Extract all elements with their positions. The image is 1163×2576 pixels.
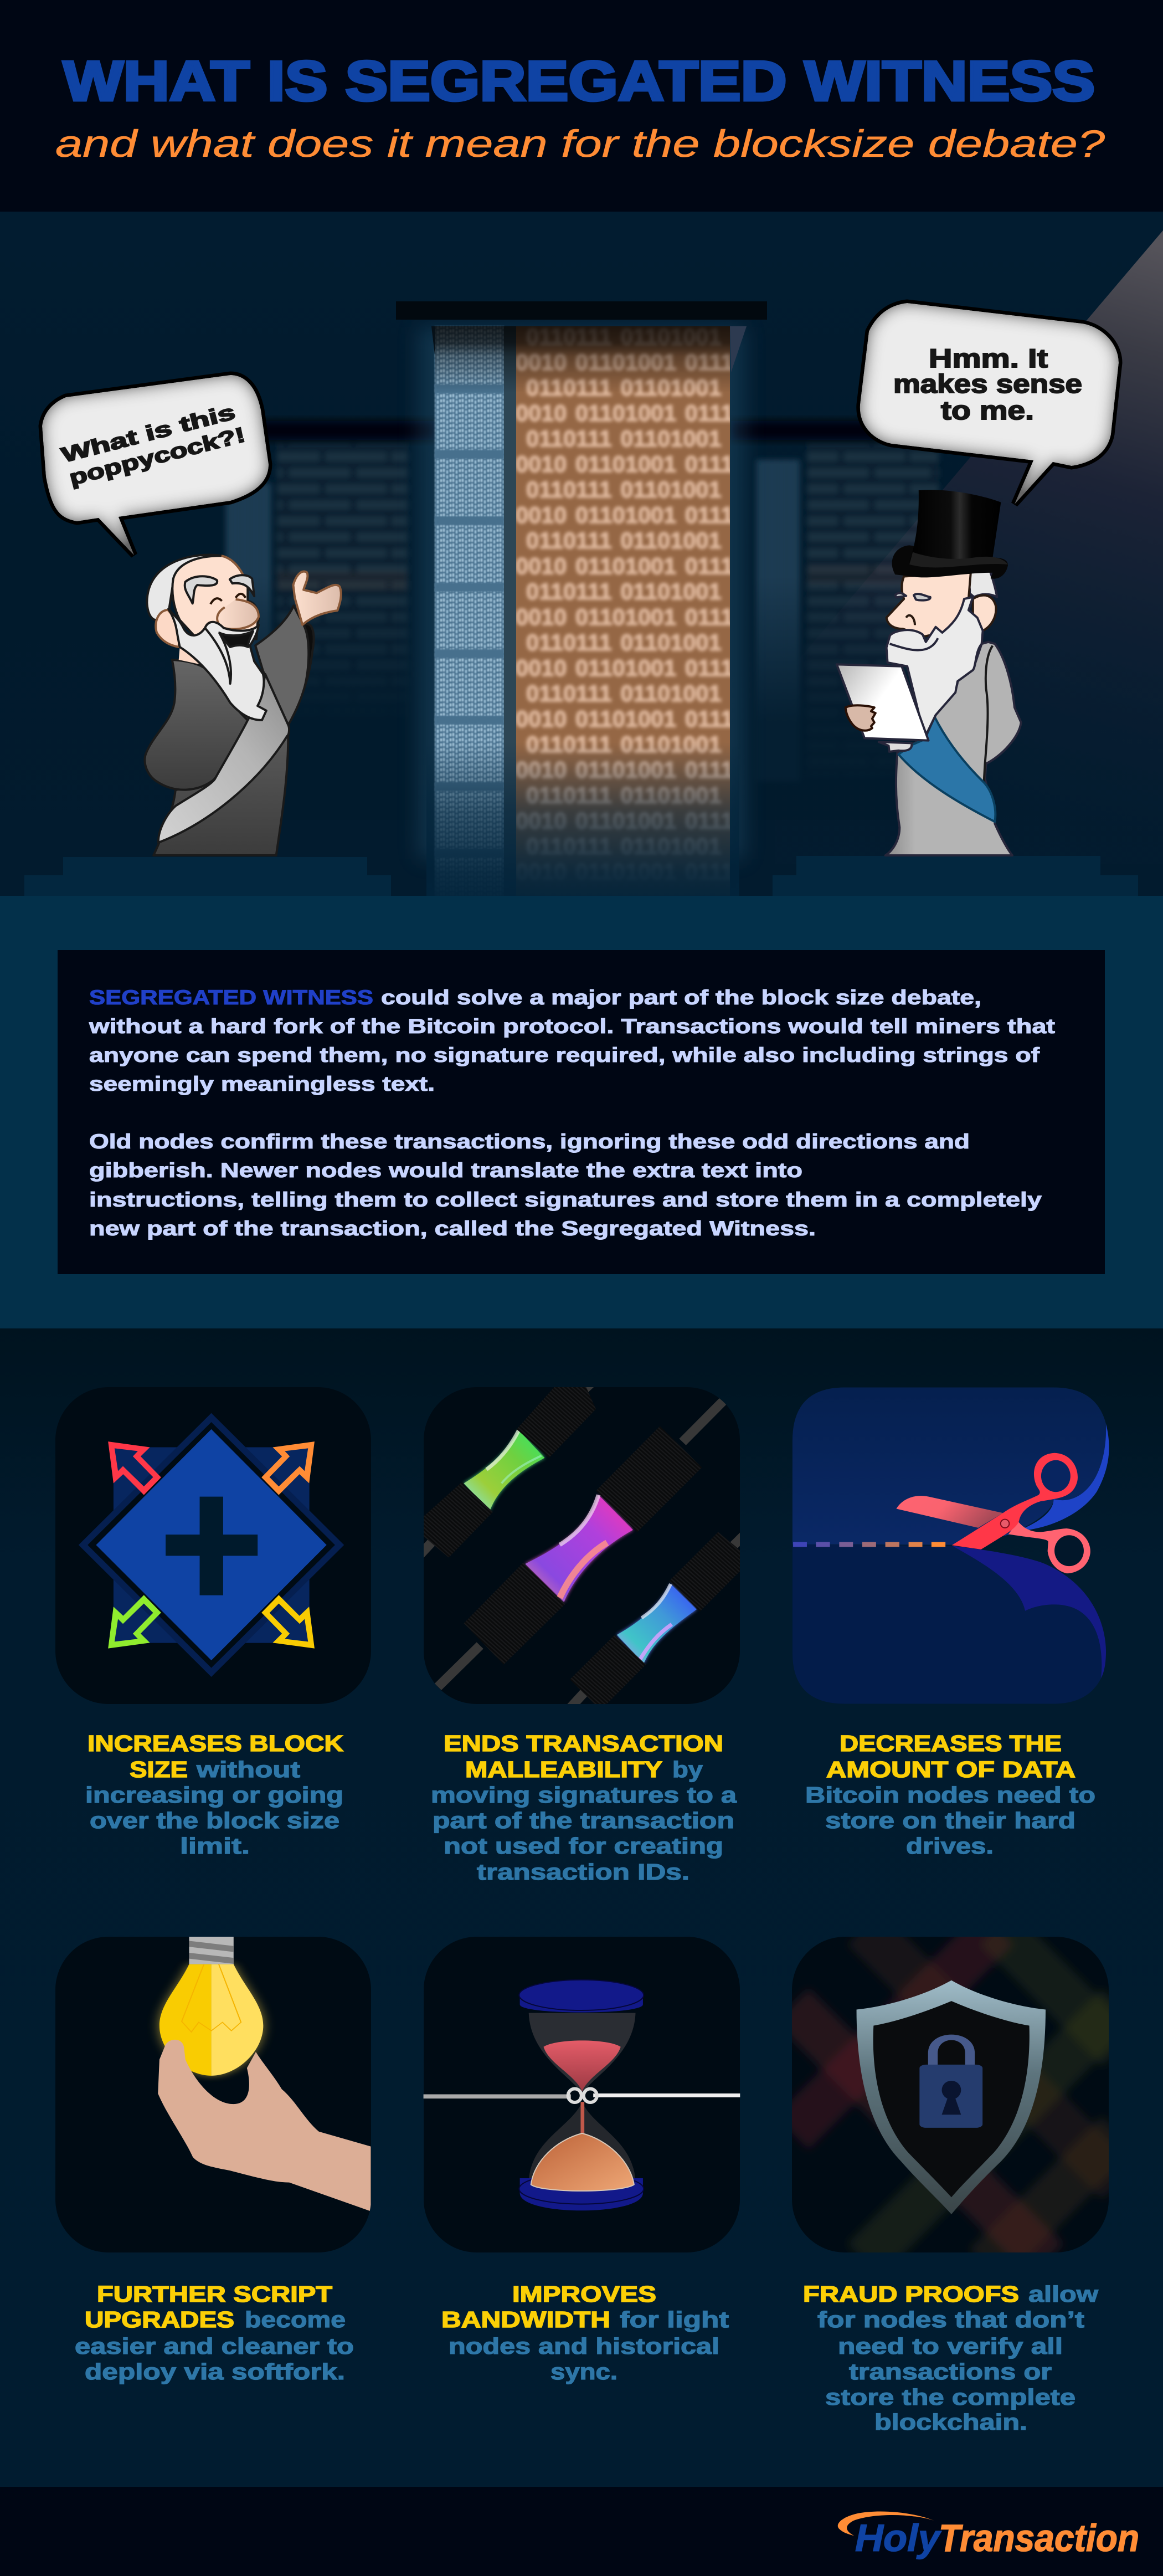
subtitle: and what does it mean for the blocksize debate?	[55, 122, 1105, 165]
orange binary column: 0110111 01101001	[526, 527, 722, 553]
icon: transaction malleability cables	[424, 1387, 740, 1704]
bubble text	[893, 343, 1082, 425]
arrow: green	[108, 1595, 161, 1649]
caption: decreases the amount of data: drives.	[906, 1833, 994, 1859]
panel: intro text: gibberish. Newer nodes would translate the extra text into	[89, 1159, 802, 1182]
scissors	[896, 1453, 1090, 1573]
bubble text: Hmm. It	[929, 343, 1048, 373]
caption: fraud proofs: allow	[1028, 2281, 1098, 2307]
caption: decreases the amount of data: AMOUNT OF DATA	[826, 1757, 1075, 1782]
panel: intro text	[58, 950, 1105, 1274]
icon: hand holding light bulb	[55, 1937, 371, 2252]
orange binary column: 0110111 01101001	[526, 324, 722, 350]
orange binary column: 0110111 01101001	[526, 731, 722, 757]
orange binary column: 0010 01101001 01111	[516, 757, 745, 783]
icon: increases block size	[55, 1387, 371, 1704]
title: WHAT IS SEGREGATED WITNESS	[63, 50, 1095, 112]
spotlight beam	[775, 230, 1163, 864]
orange binary column	[516, 324, 745, 897]
caption: further script upgrades	[75, 2281, 354, 2384]
caption: decreases the amount of data: DECREASES THE	[840, 1731, 1062, 1756]
header band	[0, 0, 1163, 212]
icon: hourglass with knotted rope	[424, 1937, 740, 2252]
bubble text: What is this	[59, 401, 238, 468]
orange binary column: 0110111 01101001	[526, 782, 722, 808]
speech bubble: left	[42, 375, 269, 555]
caption: decreases the amount of data: store on their hard	[825, 1808, 1075, 1833]
caption: ends transaction malleability	[431, 1731, 737, 1885]
orange binary column: 0010 01101001 01111	[516, 808, 745, 834]
orange binary column: 0010 01101001 01111	[516, 502, 745, 528]
bubble text	[59, 401, 248, 490]
panel: intro text: new part of the transaction, called the Segregated Witness.	[89, 1217, 816, 1240]
bubble text: makes sense	[893, 369, 1082, 398]
caption: ends transaction malleability: part of the transaction	[433, 1808, 734, 1833]
caption: ends transaction malleability: MALLEABILITY	[465, 1757, 662, 1782]
orange binary column: 0010 01101001 01111	[516, 859, 745, 885]
arrow: yellow	[261, 1595, 315, 1649]
orange binary column: 0010 01101001 01111	[516, 553, 745, 579]
rope	[424, 2089, 740, 2102]
orange binary column: 0110111 01101001	[526, 374, 722, 401]
caption: fraud proofs: transactions or	[849, 2359, 1052, 2384]
caption: improves bandwidth	[441, 2281, 729, 2384]
caption: increases block size: limit.	[180, 1833, 250, 1859]
panel: intro text: SEGREGATED WITNESS	[89, 986, 373, 1009]
caption: increases block size: increasing or going	[85, 1782, 343, 1808]
arrow: red	[108, 1441, 161, 1495]
caption: fraud proofs: for nodes that don’t	[817, 2307, 1084, 2332]
lintel	[396, 301, 767, 320]
caption: improves bandwidth: for light	[620, 2307, 729, 2332]
orange binary column: 0110111 01101001	[526, 833, 722, 859]
orange binary column: 0010 01101001 01111	[516, 349, 745, 375]
orange binary column: 0010 01101001 01111	[516, 706, 745, 732]
caption: fraud proofs: store the complete	[825, 2384, 1075, 2410]
caption: improves bandwidth: IMPROVES	[512, 2281, 656, 2307]
orange binary column: 0110111 01101001	[526, 476, 722, 502]
caption: decreases the amount of data: Bitcoin nodes need to	[805, 1782, 1095, 1808]
caption: fraud proofs: blockchain.	[874, 2409, 1027, 2435]
caption: increases block size	[85, 1731, 343, 1859]
orange binary column: 0110111 01101001	[526, 680, 722, 706]
caption: further script upgrades: UPGRADES	[85, 2307, 234, 2332]
caption: ends transaction malleability: moving signatures to a	[431, 1782, 737, 1808]
logo: Holy	[855, 2517, 942, 2559]
caption: increases block size: without	[196, 1757, 300, 1782]
orange binary column: 0010 01101001 01111	[516, 400, 745, 426]
arrow: orange	[261, 1441, 315, 1495]
caption: improves bandwidth: BANDWIDTH	[441, 2307, 610, 2332]
caption: improves bandwidth: sync.	[550, 2359, 617, 2384]
hero scene	[0, 212, 1163, 899]
caption: ends transaction malleability: by	[672, 1757, 703, 1782]
caption: ends transaction malleability: not used for creating	[444, 1833, 723, 1859]
caption: improves bandwidth: nodes and historical	[449, 2333, 719, 2359]
caption: further script upgrades: deploy via softfork.	[85, 2359, 345, 2384]
character: left sage	[145, 555, 341, 855]
orange binary column: 0110111 01101001	[526, 629, 722, 655]
speech bubble: right	[860, 303, 1119, 504]
orange binary column: 0010 01101001 01111	[516, 655, 745, 681]
features section	[0, 1328, 1163, 2487]
caption: further script upgrades: FURTHER SCRIPT	[97, 2281, 332, 2307]
right background server column	[757, 443, 939, 781]
orange binary column: 0010 01101001 01111	[516, 604, 745, 630]
logo: Transaction	[939, 2517, 1139, 2559]
panel: intro text: without a hard fork of the Bitcoin protocol. Transactions would tell miners that	[89, 1015, 1055, 1038]
padlock	[919, 2038, 982, 2128]
character: right sage with top hat	[837, 490, 1021, 855]
caption: ends transaction malleability: transaction IDs.	[477, 1859, 689, 1885]
caption: fraud proofs	[803, 2281, 1098, 2435]
caption: fraud proofs: need to verify all	[838, 2333, 1063, 2359]
bubble text: to me.	[941, 396, 1034, 425]
panel: intro text: seemingly meaningless text.	[89, 1073, 435, 1095]
caption: ends transaction malleability: ENDS TRANSACTION	[444, 1731, 723, 1756]
panel: intro text: could solve a major part of the block size debate,	[381, 986, 981, 1009]
caption: decreases the amount of data	[805, 1731, 1095, 1859]
icon: scissors cutting data	[793, 1388, 1109, 1704]
orange binary column: 0110111 01101001	[526, 425, 722, 451]
icon: shield with padlock	[792, 1928, 1119, 2266]
caption: fraud proofs: FRAUD PROOFS	[803, 2281, 1019, 2307]
dashed cut line	[793, 1542, 945, 1547]
orange binary column: 0010 01101001 01111	[516, 451, 745, 477]
panel: intro text: Old nodes confirm these transactions, ignoring these odd directions and	[89, 1130, 970, 1153]
blue data column	[435, 326, 504, 897]
caption: increases block size: over the block size	[90, 1808, 339, 1833]
panel: intro text: anyone can spend them, no signature required, while also including strings of	[89, 1044, 1040, 1066]
stage steps	[24, 856, 1138, 896]
left background server column	[226, 443, 408, 804]
panel: intro text: instructions, telling them to collect signatures and store them in a completely	[89, 1188, 1042, 1211]
logo	[838, 2511, 1139, 2559]
bubble text: poppycock?!	[67, 423, 248, 490]
footer band	[0, 2487, 1163, 2576]
caption: further script upgrades: easier and cleaner to	[75, 2333, 354, 2359]
caption: increases block size: INCREASES BLOCK	[88, 1731, 343, 1756]
intro band	[0, 896, 1163, 1328]
caption: further script upgrades: become	[245, 2307, 346, 2332]
orange binary column: 0110111 01101001	[526, 578, 722, 604]
argyle pattern	[792, 1928, 1119, 2266]
caption: increases block size: SIZE	[130, 1757, 188, 1782]
